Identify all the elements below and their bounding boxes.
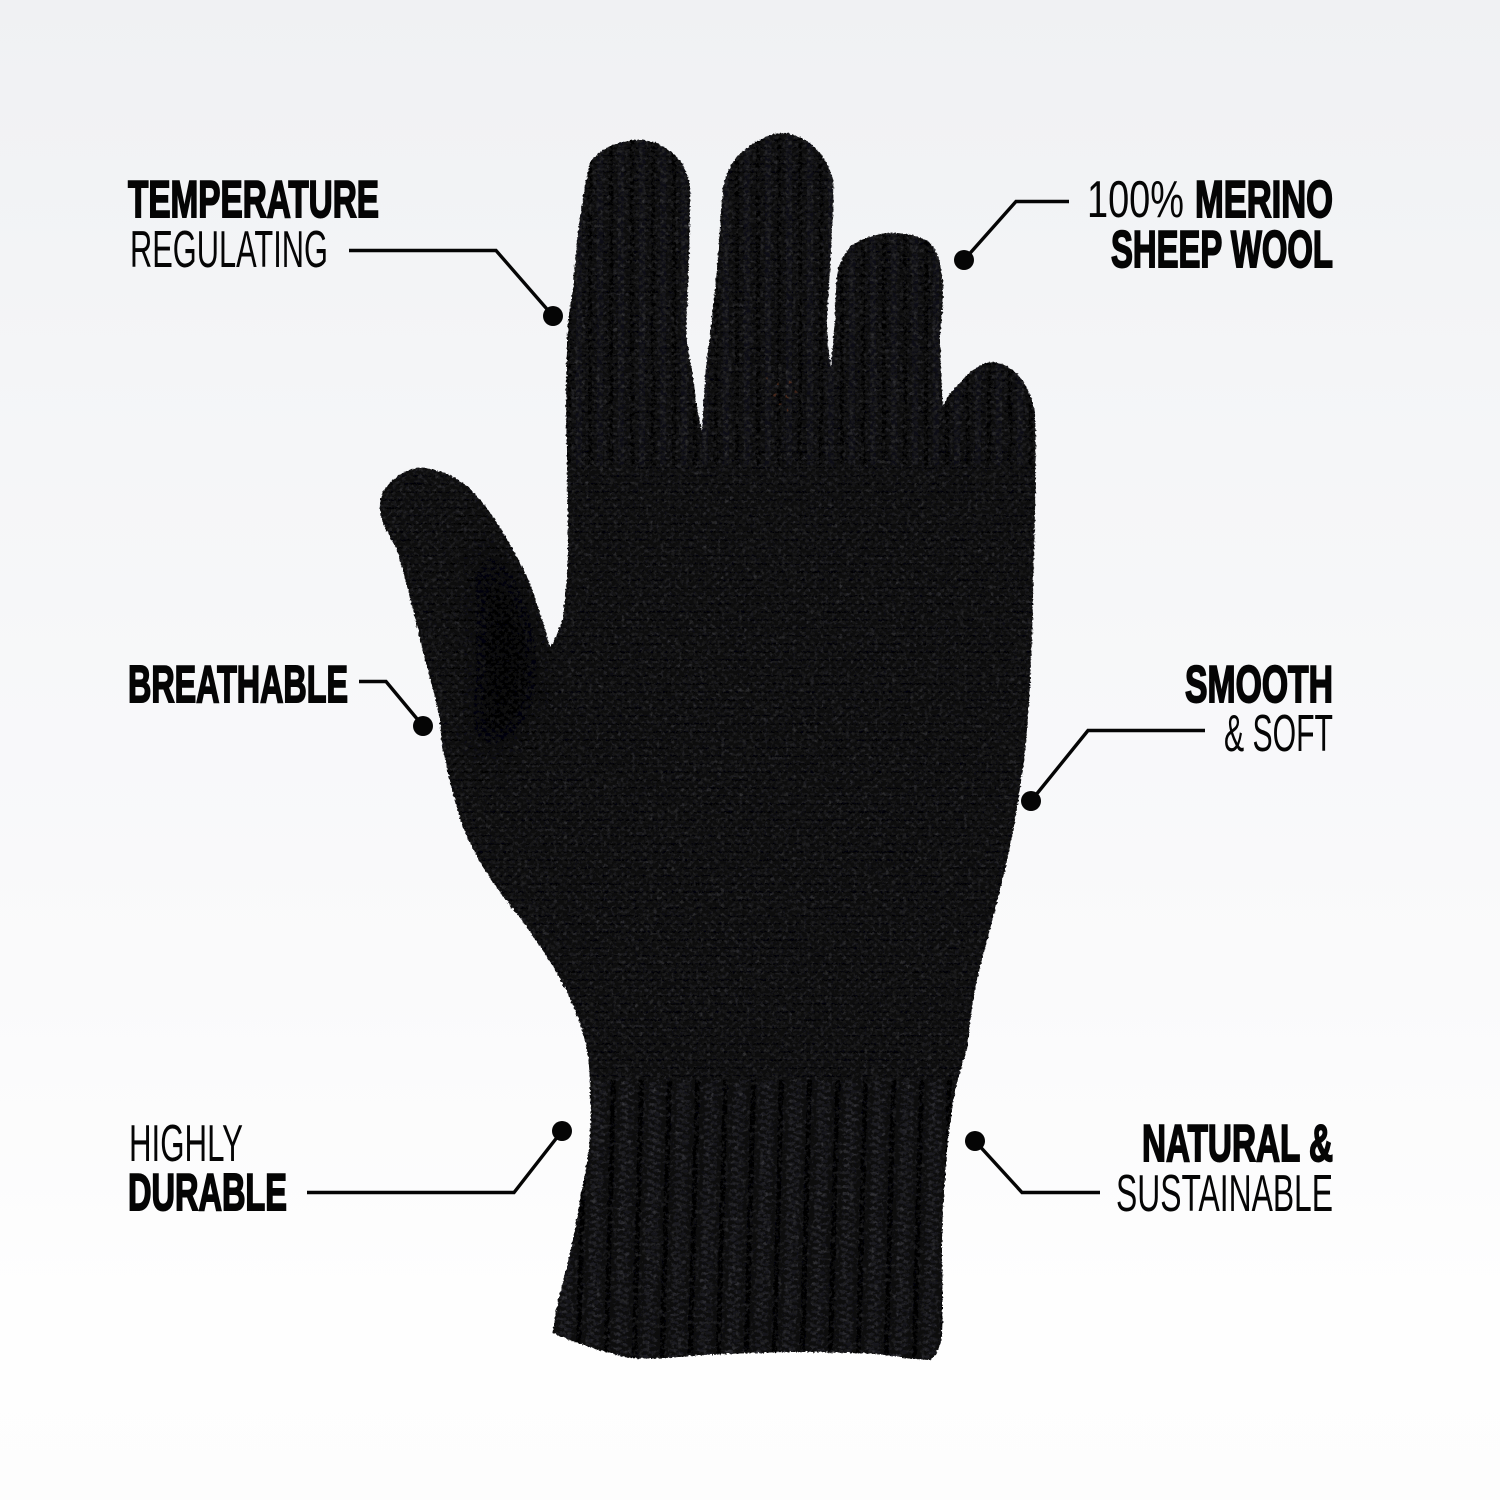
label: breathable: BREATHABLE: [128, 656, 348, 714]
callout: natural and sustainable: [965, 1115, 1333, 1223]
label: temperature regulating: REGULATING: [130, 221, 328, 279]
label: highly durable: DURABLE: [128, 1164, 287, 1222]
callout: merino sheep wool: [954, 171, 1333, 279]
marker dot: breathable: [413, 716, 433, 736]
label: natural and sustainable: [1116, 1115, 1333, 1223]
glove photo illustration: [370, 125, 1045, 1370]
label: highly durable: HIGHLY: [129, 1115, 243, 1173]
leader line: temperature regulating: [349, 250, 553, 316]
marker dot: natural and sustainable: [965, 1131, 985, 1151]
marker dot: merino sheep wool: [954, 250, 974, 270]
marker dot: smooth and soft: [1021, 791, 1041, 811]
callout: temperature regulating: [128, 171, 563, 326]
leader line: smooth and soft: [1031, 730, 1205, 801]
label: smooth and soft: & SOFT: [1224, 705, 1333, 763]
label: merino sheep wool: [1087, 171, 1333, 279]
label: temperature regulating: [128, 171, 379, 279]
label: natural and sustainable: NATURAL &: [1142, 1115, 1333, 1173]
label: merino sheep wool: SHEEP WOOL: [1111, 221, 1333, 279]
label: smooth and soft: [1185, 656, 1333, 763]
callout: breathable: [128, 656, 433, 736]
label: temperature regulating: TEMPERATURE: [128, 171, 379, 229]
marker dot: highly durable: [552, 1121, 572, 1141]
callout: highly durable: [128, 1115, 572, 1222]
label: smooth and soft: SMOOTH: [1185, 656, 1333, 714]
label: merino sheep wool: MERINO: [1195, 171, 1333, 229]
label: natural and sustainable: SUSTAINABLE: [1116, 1165, 1333, 1223]
leader line: merino sheep wool: [964, 202, 1069, 260]
label: merino sheep wool: 100%: [1087, 171, 1184, 229]
label: highly durable: [128, 1115, 287, 1222]
marker dot: temperature regulating: [543, 306, 563, 326]
leader line: natural and sustainable: [975, 1141, 1100, 1192]
callout: smooth and soft: [1021, 656, 1333, 811]
leader line: breathable: [359, 682, 423, 726]
leader line: highly durable: [307, 1131, 562, 1192]
